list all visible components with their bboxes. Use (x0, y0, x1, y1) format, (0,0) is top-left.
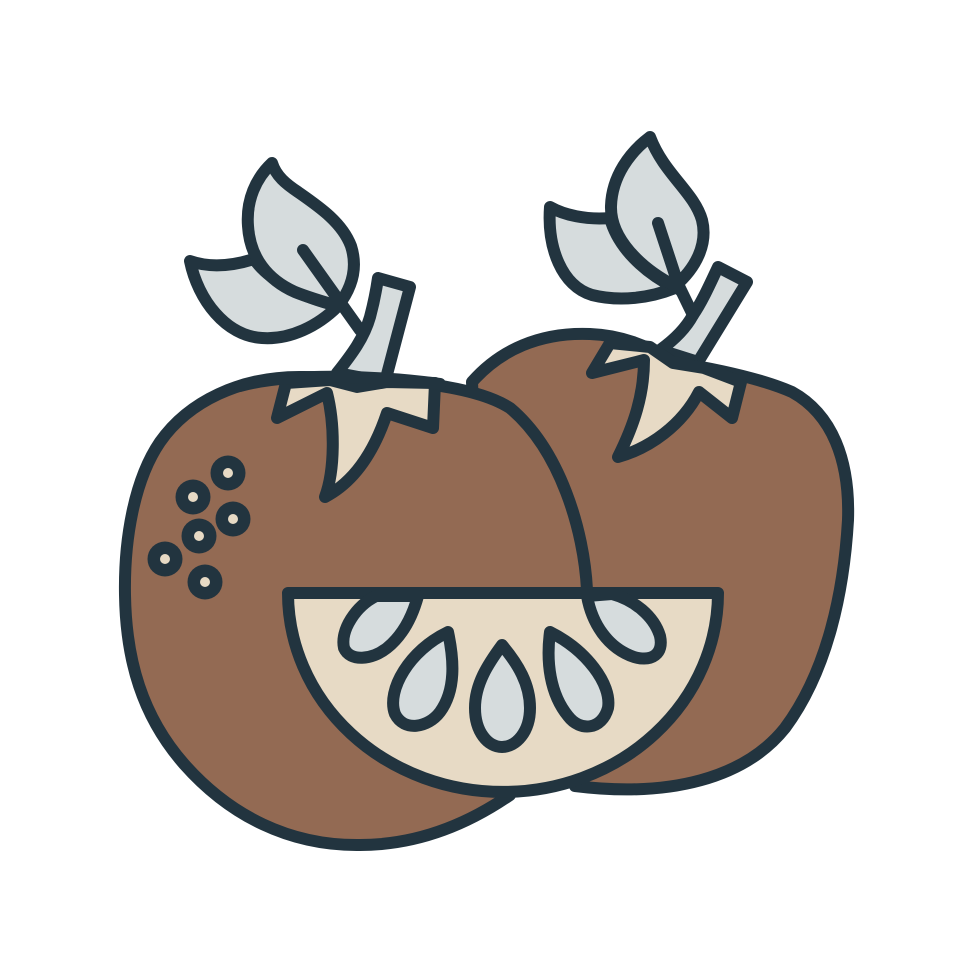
back fruit leaf vein (658, 223, 693, 315)
front fruit speckles (148, 456, 250, 600)
front fruit stem (337, 278, 410, 382)
front fruit body (125, 377, 590, 845)
back fruit body (472, 334, 848, 789)
front fruit leaf vein (303, 250, 360, 330)
back fruit stem (660, 267, 747, 362)
fruit slice (288, 593, 718, 792)
back fruit upper leaf (611, 137, 704, 286)
front fruit calyx (277, 380, 435, 497)
front fruit (125, 163, 590, 845)
slice flesh (288, 593, 718, 792)
front fruit lower leaf (190, 259, 338, 338)
back fruit lower leaf (550, 207, 675, 299)
front fruit upper leaf (248, 163, 354, 306)
front fruit top line (240, 377, 440, 386)
slice seeds (343, 594, 661, 747)
front fruit vein over leaf (303, 250, 340, 302)
back fruit vein over leaf (658, 223, 680, 290)
back fruit (472, 137, 848, 789)
back fruit calyx (592, 343, 741, 457)
